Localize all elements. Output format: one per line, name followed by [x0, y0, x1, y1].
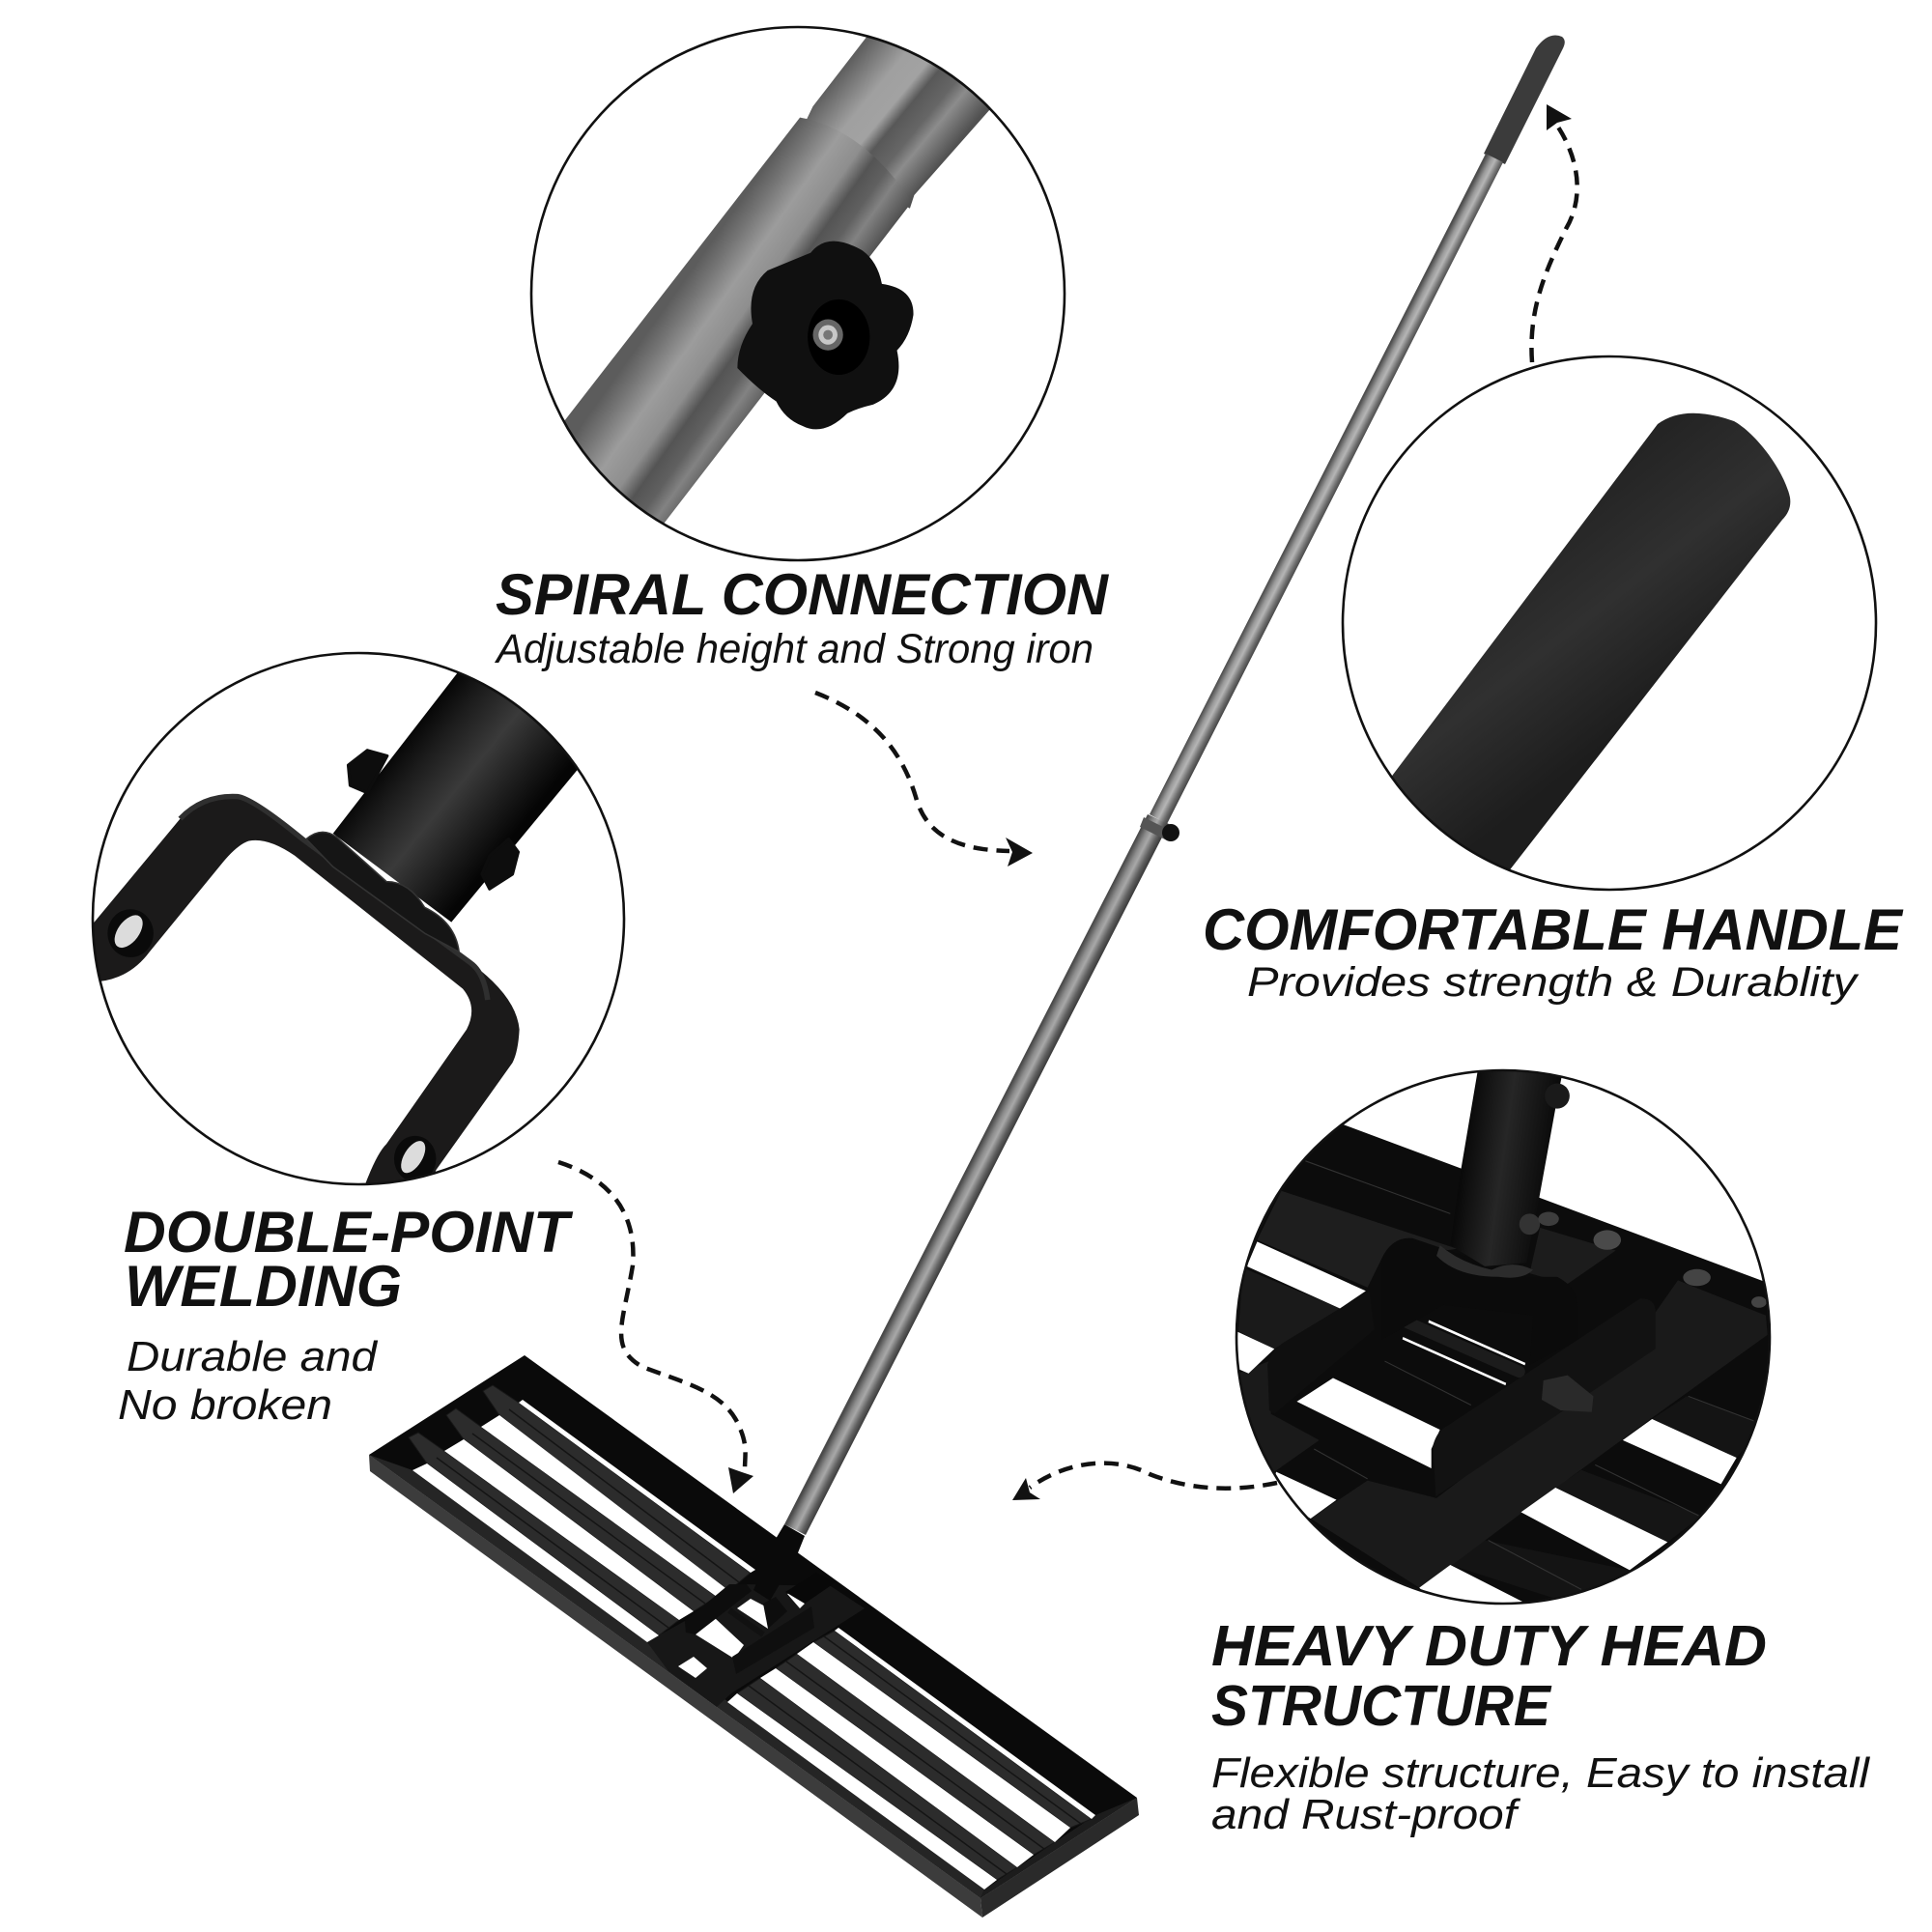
- arrow: spiral connection to pole joint: [815, 693, 1033, 867]
- upper pole: [1150, 154, 1503, 824]
- left upright: [1267, 1306, 1343, 1411]
- panel: comfortable handle detail circle: [1343, 356, 1876, 898]
- heading: heavy duty head structure: HEAVY DUTY HEAD: [1211, 1614, 1767, 1678]
- rake end side: [980, 1798, 1139, 1918]
- panel: double-point welding detail circle: [81, 641, 624, 1200]
- white slots: [1236, 1241, 1737, 1625]
- text: comfortable handle description: Provides strength & Durablity: [1247, 959, 1860, 1006]
- base plates: [647, 1584, 865, 1707]
- pin rod: [729, 1610, 763, 1634]
- u-bracket: [1381, 1238, 1567, 1327]
- heading: heavy duty head structure: STRUCTURE: [1211, 1674, 1552, 1738]
- panel: heavy duty head detail circle: [1235, 1068, 1772, 1605]
- base plates: [1311, 1280, 1768, 1588]
- product: lawn leveling rake: [369, 35, 1565, 1918]
- dim bars: [1257, 1191, 1457, 1288]
- rake end strip: [980, 1798, 1137, 1898]
- heading: spiral connection: SPIRAL CONNECTION: [496, 562, 1110, 627]
- weld beads: [306, 832, 459, 952]
- bar highlights: [1305, 1161, 1754, 1589]
- joint knob: [1140, 817, 1179, 841]
- socket: [753, 1524, 805, 1601]
- inner bars: [409, 1385, 1092, 1880]
- hole left: [107, 909, 154, 957]
- text: spiral connection description: Adjustable height and Strong iron: [494, 626, 1094, 672]
- bolt: [482, 839, 518, 889]
- grip: [1484, 35, 1565, 164]
- hole bottom: [394, 1136, 436, 1181]
- lower pole: [784, 814, 1169, 1535]
- U bracket: [81, 796, 520, 1200]
- threaded bolt: [1542, 1376, 1593, 1412]
- front strip: [369, 1455, 984, 1898]
- arrow: handle circle to grip: [1531, 104, 1577, 362]
- left upright: [685, 1584, 752, 1634]
- foam grip: [1392, 413, 1791, 869]
- thin upper tube: [807, 31, 1001, 209]
- u-bracket right side: [763, 1597, 787, 1629]
- heading: double-point welding: DOUBLE-POINT: [124, 1200, 573, 1264]
- socket tube: [1450, 1069, 1562, 1266]
- right upright: [732, 1606, 814, 1674]
- panel: spiral connection detail circle: [531, 27, 1065, 560]
- slots: [412, 1400, 1095, 1889]
- nut: [349, 751, 387, 793]
- text: head structure description: Flexible structure, Easy to install: [1211, 1749, 1870, 1797]
- pin rod: [1392, 1316, 1520, 1372]
- welded tube: [332, 673, 578, 923]
- upper notch: [785, 1573, 836, 1604]
- outer sleeve tube: [564, 118, 912, 524]
- arrow: welding circle to rake: [558, 1162, 753, 1493]
- icon: star knob: [737, 242, 914, 429]
- arrow: head circle to rake: [1012, 1463, 1277, 1500]
- text: head structure description: and Rust-proof: [1211, 1791, 1521, 1838]
- bar center lines: [437, 1409, 1081, 1874]
- frame base: [1237, 1124, 1769, 1602]
- text: welding description: No broken: [118, 1381, 332, 1429]
- text: welding description: Durable and: [127, 1333, 379, 1380]
- rake frame top: [369, 1355, 1137, 1898]
- heading: comfortable handle: COMFORTABLE HANDLE: [1203, 897, 1904, 962]
- welds: [1436, 1245, 1533, 1278]
- right upright: [1434, 1350, 1654, 1472]
- heading: double-point welding: WELDING: [125, 1254, 402, 1319]
- rake front side: [369, 1455, 982, 1918]
